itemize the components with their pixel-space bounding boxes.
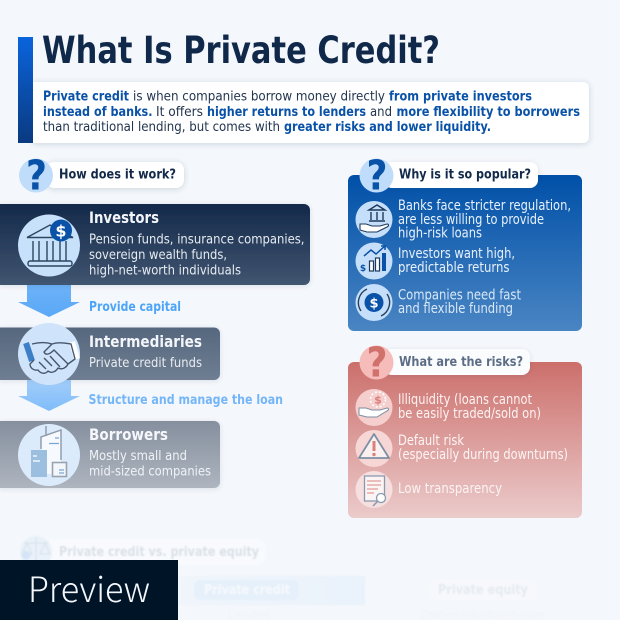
intro panel: from private investors	[389, 88, 532, 104]
heading: risks	[360, 338, 530, 386]
icon: document magnifier	[356, 471, 392, 508]
intro panel	[18, 37, 589, 143]
panel: investors: Investors	[89, 208, 159, 227]
icon: circulating dollar	[356, 284, 392, 321]
icon: office buildings	[18, 424, 80, 486]
intro panel: instead of banks.	[43, 104, 152, 120]
icon: illiquidity hand	[356, 389, 392, 426]
faded section: private credit vs private equity: Private equity	[438, 582, 528, 598]
arrow label: structure and manage: Structure and manage the loan	[88, 392, 283, 408]
intro panel: is when companies borrow money directly	[133, 88, 385, 104]
heading: risks: What are the risks?	[399, 354, 523, 370]
panel: borrowers: mid-sized companies	[89, 464, 211, 480]
icon: growth chart	[356, 242, 392, 280]
heading: risks: ?	[366, 338, 388, 386]
intro panel: and	[370, 104, 392, 120]
intro panel: than traditional lending, but comes with	[43, 119, 280, 135]
panel: what are the risks	[348, 338, 582, 518]
text: investors want: predictable returns	[398, 260, 510, 276]
text: companies need	[398, 288, 521, 317]
icon: circulating dollar: $	[369, 296, 379, 312]
heading: how does it work	[19, 152, 184, 200]
panel: intermediaries: Private credit funds	[89, 355, 202, 371]
text: banks	[398, 198, 571, 242]
text: banks: high-risk loans	[398, 226, 482, 242]
text: default risk	[398, 433, 568, 463]
panel: investors: Pension funds, insurance companies,	[89, 232, 304, 248]
icon: bank with dollar	[18, 214, 80, 276]
panel: investors	[0, 204, 310, 285]
intro panel: Private credit	[43, 88, 129, 104]
intro panel: greater risks and lower liquidity.	[284, 119, 491, 135]
text: low transparency: Low transparency	[398, 481, 502, 497]
intro panel: higher returns to lenders	[207, 104, 366, 120]
text: investors want	[398, 246, 515, 276]
heading: why popular: ?	[366, 152, 388, 200]
arrow: provide capital	[18, 284, 80, 317]
intro panel: more flexibility to borrowers	[396, 104, 580, 120]
text: illiquidity	[398, 392, 541, 422]
text: investors want: Investors want high,	[398, 246, 515, 262]
faded section: private credit vs private equity	[20, 536, 545, 620]
arrow label: provide capital: Provide capital	[89, 299, 181, 315]
panel: borrowers: Borrowers	[89, 425, 168, 444]
heading: how does it work: ?	[26, 152, 47, 200]
title: What Is Private Credit?	[42, 29, 440, 72]
text: companies need: Companies need fast	[398, 288, 521, 304]
panel: investors: high-net-worth individuals	[89, 262, 241, 278]
icon: warning triangle	[356, 430, 392, 467]
panel: investors: sovereign wealth funds,	[89, 247, 227, 263]
icon: bank in hand	[356, 201, 392, 238]
icon: bank with dollar: $	[55, 222, 67, 240]
intro panel: It offers	[156, 104, 203, 120]
icon: growth chart: $	[360, 264, 366, 274]
panel: borrowers	[0, 421, 220, 488]
text: banks: Banks face stricter regulation,	[398, 198, 571, 214]
preview badge: Preview	[28, 562, 150, 613]
icon: handshake	[18, 323, 80, 385]
panel: intermediaries	[0, 323, 220, 385]
faded section: private credit vs private equity: Private credit	[204, 582, 290, 598]
text: illiquidity: be easily traded/sold on)	[398, 406, 541, 422]
panel: why is it so popular	[348, 152, 582, 331]
arrow: structure and manage	[18, 378, 80, 411]
heading: why popular	[360, 152, 538, 200]
panel: borrowers: Mostly small and	[89, 448, 187, 464]
heading: how does it work: How does it work?	[59, 166, 176, 182]
panel: intermediaries: Intermediaries	[89, 332, 202, 351]
text: banks: are less willing to provide	[398, 212, 544, 228]
text: default risk: (especially during downturns)	[398, 447, 568, 463]
text: illiquidity: Illiquidity (loans cannot	[398, 392, 532, 408]
icon: illiquidity hand: $	[374, 394, 382, 406]
heading: why popular: Why is it so popular?	[399, 166, 531, 182]
faded section: private credit vs private equity: Private credit vs. private equity	[59, 544, 259, 560]
text: default risk: Default risk	[398, 433, 464, 449]
text: companies need: and flexible funding	[398, 301, 513, 317]
preview badge	[0, 560, 178, 620]
